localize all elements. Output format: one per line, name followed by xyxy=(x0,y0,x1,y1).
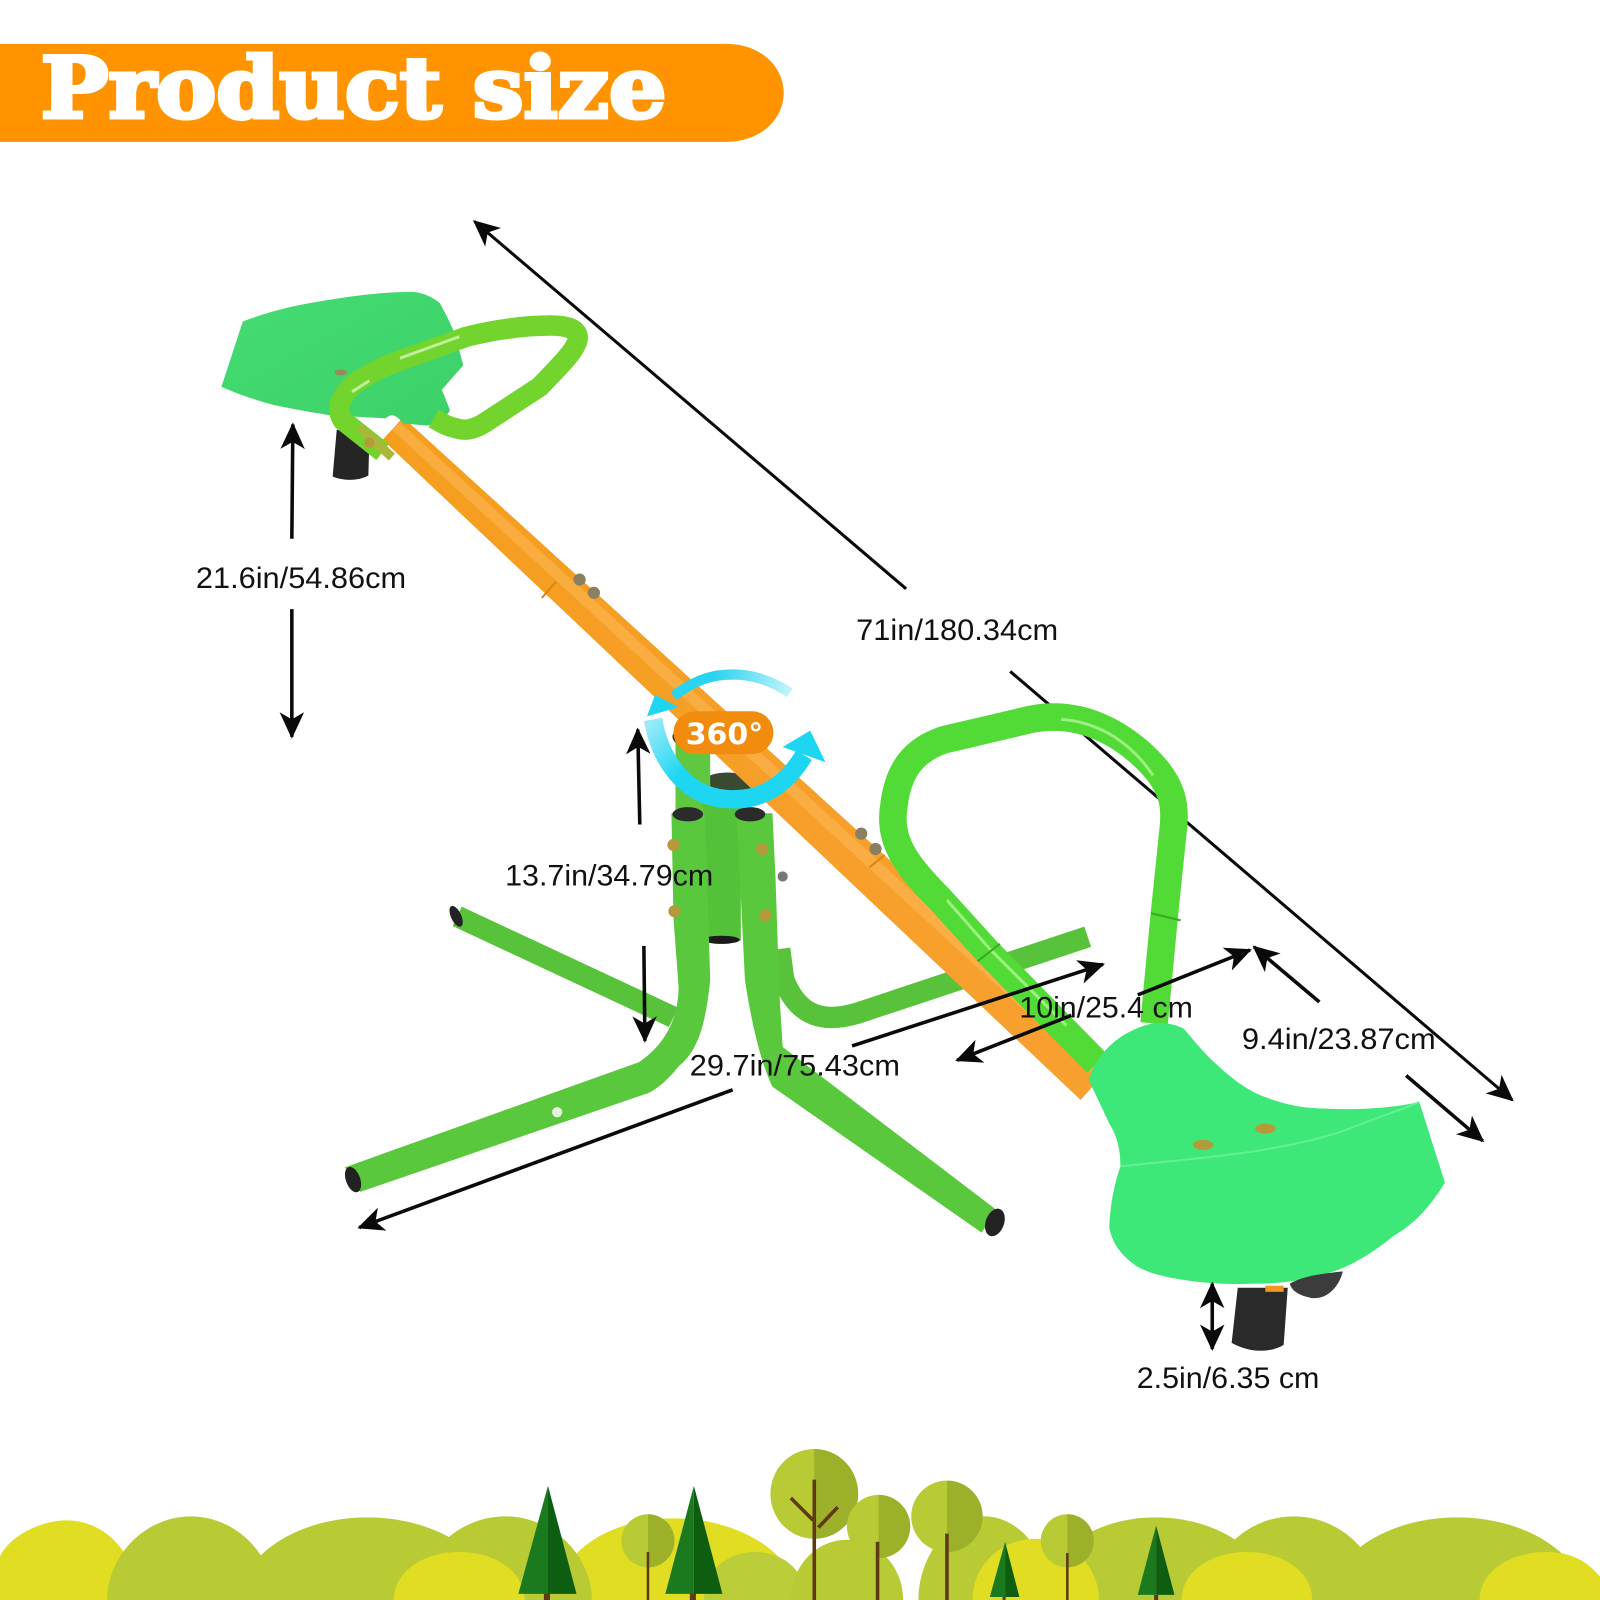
left handle xyxy=(339,326,578,457)
conifer 2 xyxy=(665,1486,722,1600)
round tree 3 xyxy=(911,1481,983,1600)
orange beam xyxy=(383,417,1113,1100)
conifer 1 xyxy=(518,1486,577,1600)
title text: Product size xyxy=(41,37,666,137)
centre post xyxy=(672,727,753,944)
round tree 4 xyxy=(621,1514,674,1600)
right rubber bumpers xyxy=(1232,1271,1343,1351)
dimension: base width 29.7in xyxy=(359,964,1103,1228)
right handle xyxy=(893,717,1181,1063)
leg caps and bolts xyxy=(342,807,1008,1239)
round tree 5 xyxy=(1041,1514,1094,1600)
conifer 4 xyxy=(1138,1526,1174,1600)
tall round tree xyxy=(770,1449,858,1600)
dimension: base width 29.7in: 29.7in/75.43cm xyxy=(690,1050,900,1083)
title banner xyxy=(0,37,784,142)
front left leg xyxy=(345,813,710,1192)
left seat bolt xyxy=(335,369,347,376)
dimension: seat depth 9.4in xyxy=(1242,947,1483,1141)
left rubber bumper xyxy=(333,430,369,480)
dimension: seat depth 9.4in: 9.4in/23.87cm xyxy=(1242,1023,1436,1056)
dimension: seat width 10in: 10in/25.4 cm xyxy=(1019,991,1193,1024)
seesaw product xyxy=(221,292,1445,1351)
dimension: bumper height 2.5in: 2.5in/6.35 cm xyxy=(1137,1362,1319,1395)
back legs xyxy=(457,916,1088,1017)
front right leg xyxy=(737,813,997,1233)
label: 71in length: 71in/180.34cm xyxy=(856,614,1058,647)
dimension: seat width 10in xyxy=(957,950,1250,1060)
round tree 2 xyxy=(847,1495,910,1600)
dimension arrow: total length 71in xyxy=(474,221,1512,1100)
left handle bolt xyxy=(364,438,374,448)
360 degree rotation badge xyxy=(647,674,826,799)
360 label: 360° xyxy=(686,717,763,751)
dimension: post height 13.7in: 13.7in/34.79cm xyxy=(505,860,713,893)
dimension: seat height 21.6in: 21.6in/54.86cm xyxy=(196,562,406,595)
rotation arrows xyxy=(647,674,826,799)
background landscape: hills and trees xyxy=(0,1449,1600,1600)
right seat xyxy=(1089,1023,1445,1284)
left seat xyxy=(221,292,463,426)
conifer 3 xyxy=(990,1542,1019,1600)
